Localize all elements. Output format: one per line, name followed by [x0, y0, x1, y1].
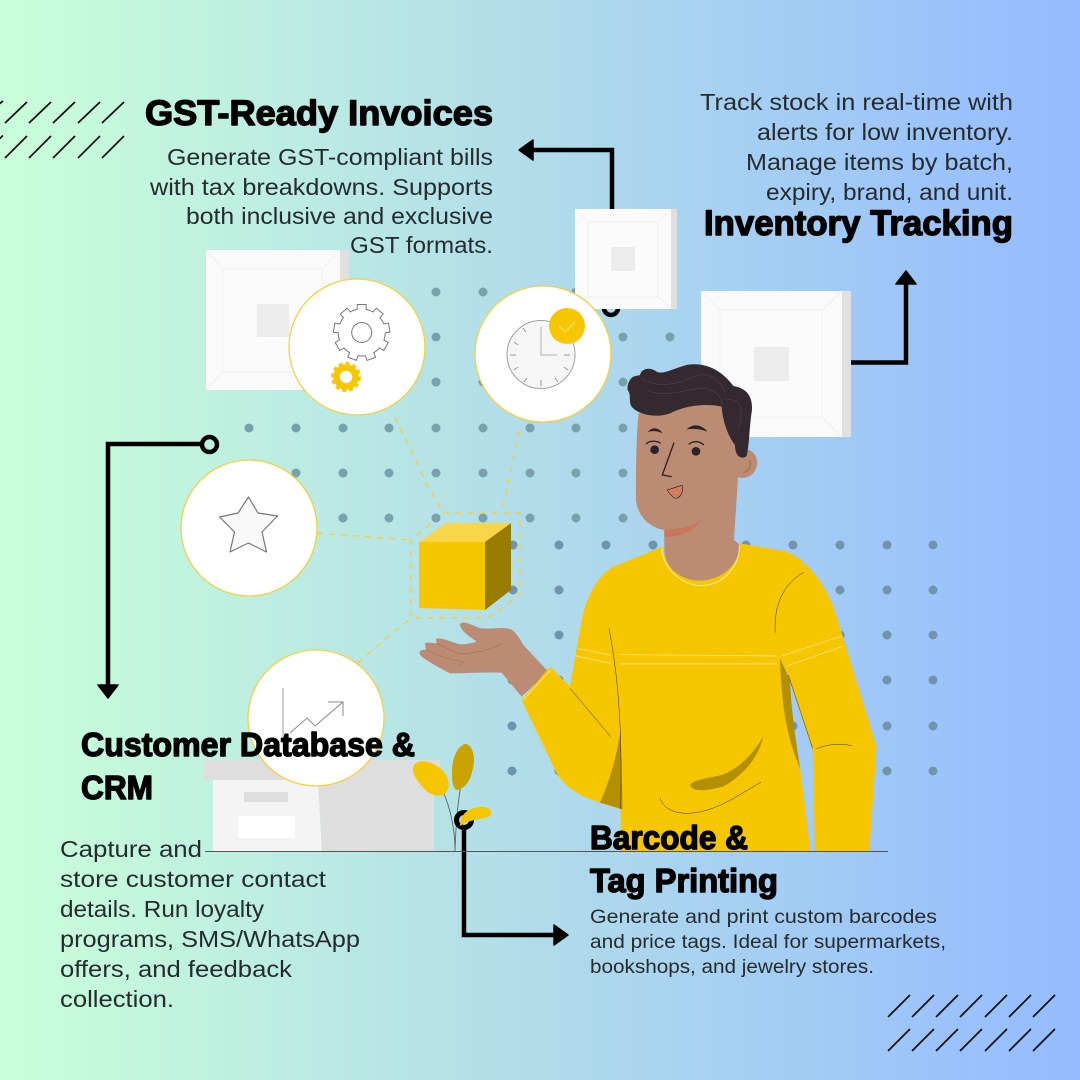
text: barcode description: bookshops, and jewelry stores.: [590, 957, 874, 978]
text: GST invoices description: [149, 144, 493, 258]
heading: Customer Database and CRM: Customer Database &: [81, 726, 415, 763]
sweater seams: [570, 572, 852, 813]
arm and hand skin: [420, 622, 548, 697]
hair: [627, 364, 752, 458]
plant: [413, 744, 474, 851]
text: inventory description: [700, 89, 1013, 205]
heading: GST-Ready Invoices: GST-Ready Invoices: [145, 94, 493, 133]
text: customer description: store customer contact: [60, 866, 327, 892]
heading: Inventory Tracking: Inventory Tracking: [704, 204, 1013, 243]
text: inventory description: Track stock in real-time with: [700, 89, 1013, 115]
decorative hatch top-left: [0, 101, 124, 158]
text: inventory description: alerts for low inventory.: [757, 119, 1013, 145]
sweater shadows: [600, 658, 800, 809]
text: GST invoices description: both inclusive and exclusive: [186, 203, 493, 229]
heading: Barcode and Tag Printing: [590, 819, 778, 899]
text: barcode description: and price tags. Ideal for supermarkets,: [590, 932, 946, 953]
arrow: to Inventory Tracking: [851, 271, 916, 362]
heading: Customer Database and CRM: [81, 726, 415, 806]
dot grid: [244, 288, 674, 522]
person illustration: [420, 364, 877, 851]
hand creases: [426, 643, 502, 666]
icon: wall box large left: [206, 250, 349, 390]
icon: wall box right: [701, 291, 851, 437]
eyebrows: [648, 425, 707, 433]
sweater: [522, 543, 877, 851]
icon circle: gears: [289, 279, 425, 415]
text: GST invoices description: Generate GST-compliant bills: [167, 144, 493, 170]
arrow: to Barcode and Tag Printing: [456, 807, 568, 945]
text: customer description: offers, and feedback: [60, 956, 293, 982]
arrow: to Customer Database: [98, 437, 217, 698]
text: barcode description: [590, 907, 946, 978]
sweater highlights: [523, 545, 844, 700]
face details: [646, 441, 750, 477]
head and neck: [636, 400, 757, 583]
text: GST invoices description: GST formats.: [350, 232, 493, 258]
text: inventory description: Manage items by batch,: [746, 149, 1013, 175]
box on the floor: [204, 760, 440, 851]
text: inventory description: expiry, brand, and unit.: [766, 179, 1013, 205]
icon circle: star: [181, 460, 317, 596]
mouth: [667, 485, 683, 498]
text: customer description: details. Run loyalty: [60, 896, 265, 922]
arrow: to GST-Ready Invoices: [519, 140, 618, 315]
text: barcode description: Generate and print custom barcodes: [590, 907, 937, 928]
text: customer description: collection.: [60, 986, 174, 1012]
icon: wall box top: [575, 209, 677, 309]
ground line: [205, 850, 888, 852]
decorative hatch bottom-right: [888, 995, 1055, 1051]
text: customer description: programs, SMS/WhatsApp: [60, 926, 360, 952]
text: GST invoices description: with tax breakdowns. Supports: [149, 174, 493, 200]
icon circle: clock: [475, 286, 611, 422]
eyes: [650, 445, 700, 456]
text: customer description: [60, 836, 360, 1012]
hair strands: [642, 375, 741, 430]
heading: Customer Database and CRM: CRM: [81, 769, 153, 806]
heading: Barcode and Tag Printing: Tag Printing: [590, 862, 778, 899]
icon circle: growth chart: [248, 650, 384, 786]
text: customer description: Capture and: [60, 836, 202, 862]
icon: floating yellow cube: [419, 523, 511, 610]
heading: Barcode and Tag Printing: Barcode &: [590, 819, 748, 856]
neck shadow: [664, 519, 701, 537]
dashed connectors: [317, 417, 520, 663]
